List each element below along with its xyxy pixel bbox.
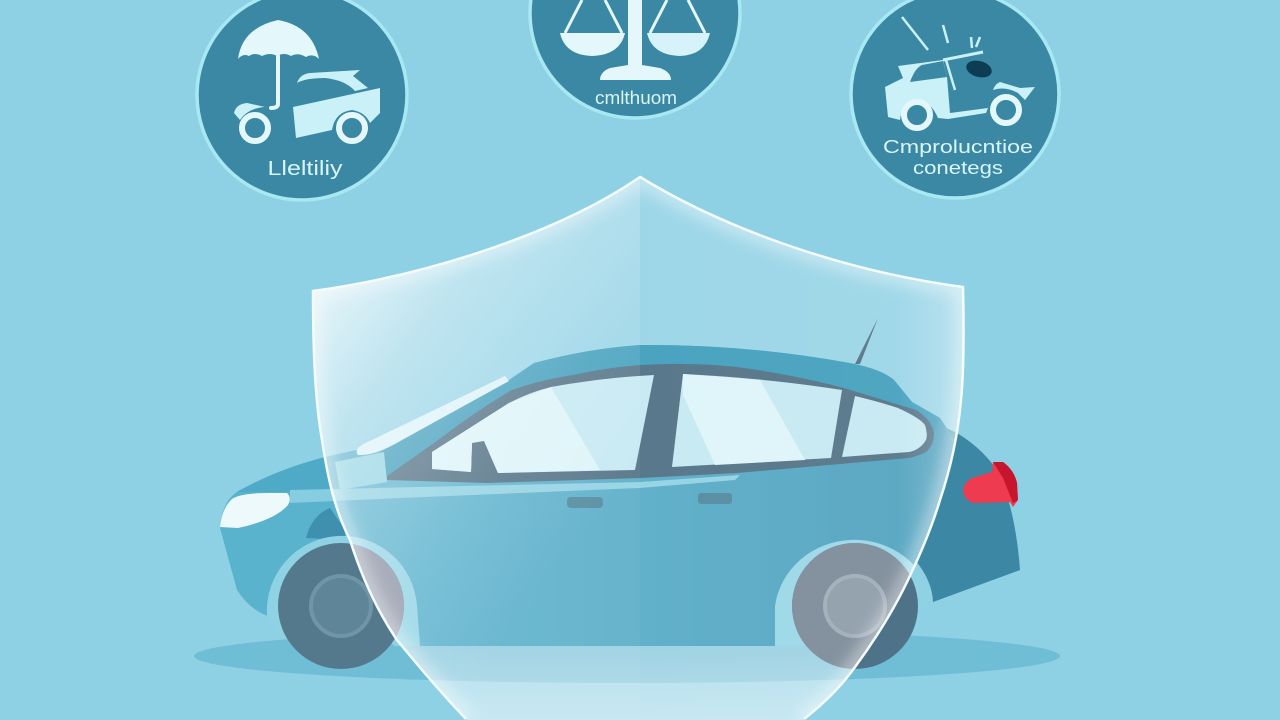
window frame	[387, 364, 934, 483]
car rear section	[900, 425, 1020, 602]
shield lower glow	[404, 646, 852, 720]
rear door handle	[698, 493, 732, 504]
front window	[432, 375, 654, 473]
icon: impact hole	[964, 58, 994, 80]
pale cowl panel	[335, 452, 387, 490]
badge: collision	[530, 0, 740, 118]
antenna	[855, 318, 878, 364]
front wheel arch interior	[306, 508, 345, 540]
icon: damaged car	[885, 52, 1035, 128]
front door handle	[567, 497, 603, 508]
badge label: cmlthuom	[595, 88, 677, 108]
icon: glass shards	[902, 17, 980, 90]
car front fender	[220, 440, 400, 640]
shield right half	[640, 170, 970, 720]
side mirror	[468, 439, 498, 476]
badge label: Cmprolucntioe	[883, 137, 1033, 157]
badge disc	[530, 0, 740, 118]
badge label: conetegs	[913, 158, 1003, 178]
window reflections	[432, 374, 805, 473]
wheels through the shield	[353, 543, 909, 669]
badge disc	[197, 0, 407, 200]
headlight	[220, 493, 290, 528]
icon: umbrella	[238, 20, 319, 108]
badge: liability	[197, 0, 407, 200]
infographic: car protected by shield	[194, 0, 1061, 720]
rear window	[842, 396, 927, 457]
car	[220, 318, 1020, 669]
badge disc	[851, 0, 1059, 198]
roof	[380, 345, 940, 478]
ground shadow	[194, 629, 1060, 683]
badge label	[883, 137, 1033, 178]
hood	[237, 440, 400, 492]
rear wheel	[792, 543, 918, 669]
shield soft inner edge	[313, 177, 964, 720]
tail light	[963, 462, 1018, 507]
shield left half	[300, 170, 640, 720]
belt line strip	[290, 475, 740, 503]
icon: scales	[560, 0, 710, 80]
badge label: Lleltiliy	[268, 158, 342, 180]
front wheel	[278, 543, 404, 669]
wheel arches	[267, 536, 420, 646]
badge: comprehensive	[851, 0, 1059, 198]
middle window	[672, 374, 842, 467]
glass shield	[278, 170, 980, 720]
shield bright rim	[313, 177, 964, 719]
windshield highlight	[357, 376, 509, 455]
main body	[345, 345, 955, 646]
icon: car under umbrella	[234, 70, 380, 141]
